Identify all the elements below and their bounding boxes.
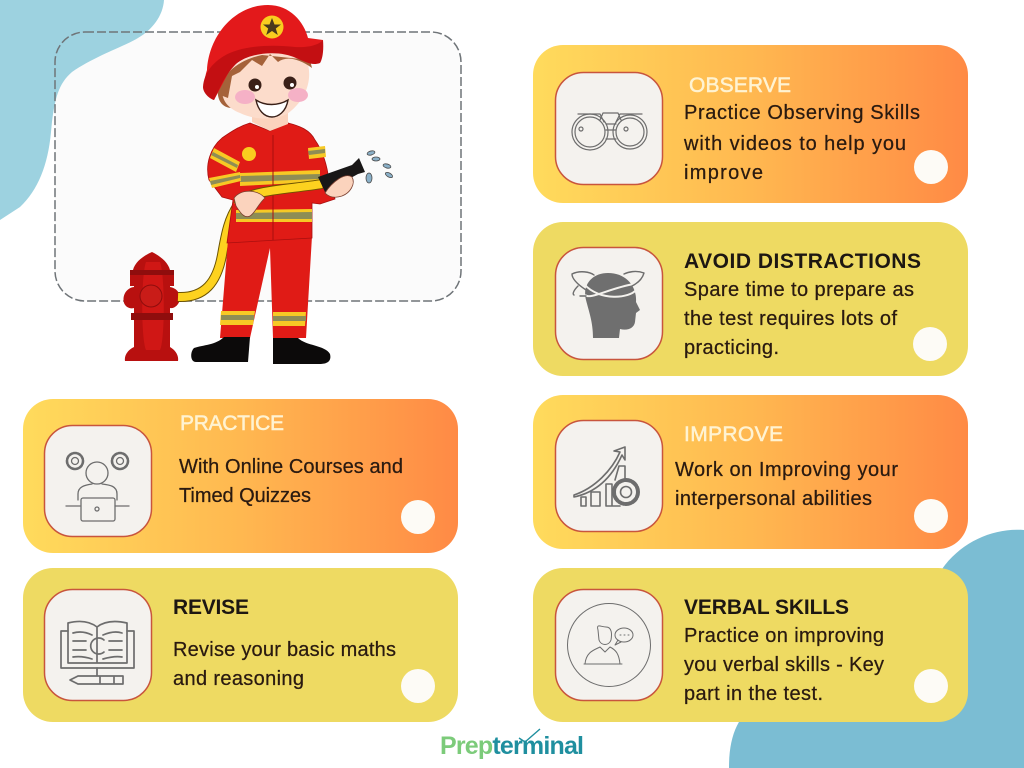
text: observe description: Practice Observing Skills: [684, 102, 920, 124]
blue blob bottom right: [729, 530, 1024, 768]
text: observe description: [683, 102, 920, 184]
water drops: [366, 150, 393, 183]
text: verbal skills description: [684, 625, 884, 705]
cheeks: [235, 88, 308, 104]
icon: open book with pencil: [61, 622, 134, 684]
text: avoid distractions description: Spare time to prepare as: [684, 279, 914, 301]
marker: [401, 500, 435, 534]
text: avoid distractions description: [684, 279, 914, 359]
panel: revise: [23, 568, 458, 722]
marker: [914, 669, 948, 703]
neck: [252, 112, 288, 131]
text: observe description: with videos to help you: [683, 133, 906, 155]
icon: growth chart with gear: [574, 447, 638, 506]
text: practice description: Timed Quizzes: [179, 485, 311, 507]
jacket button: [242, 147, 256, 161]
heading: practice: PRACTICE: [180, 412, 284, 435]
logo: Prepterminal: Prepterminal: [440, 732, 584, 760]
hose upper section: [238, 184, 322, 205]
marker: [914, 499, 948, 533]
icon: binoculars: [572, 113, 647, 150]
boots: [191, 337, 330, 364]
text: revise description: and reasoning: [173, 668, 304, 690]
text: avoid distractions description: the test requires lots of: [684, 308, 897, 330]
helmet: [203, 5, 323, 100]
text: revise description: [173, 639, 396, 690]
marker: [913, 327, 947, 361]
heading: observe: OBSERVE: [689, 74, 791, 97]
trousers: [220, 236, 312, 338]
text: practice description: With Online Courses and: [179, 456, 403, 478]
illustration: firefighter with hydrant: [123, 5, 393, 364]
panel: practice: [23, 399, 458, 553]
fire hydrant: [123, 252, 180, 361]
smile: [256, 100, 288, 117]
icon: speaker with speech bubble: [568, 604, 650, 686]
text: verbal skills description: part in the test.: [684, 683, 823, 705]
text: revise description: Revise your basic maths: [173, 639, 396, 661]
jacket reflective stripes: [209, 146, 326, 222]
text: verbal skills description: you verbal skills - Key: [684, 654, 884, 676]
text: improve description: interpersonal abilities: [675, 488, 872, 510]
jacket: [208, 123, 335, 243]
face: [222, 51, 309, 119]
hair back: [218, 60, 250, 108]
eyes: [248, 76, 296, 92]
heading: improve: IMPROVE: [684, 423, 783, 446]
text: verbal skills description: Practice on improving: [684, 625, 884, 647]
panel: observe: [533, 45, 968, 203]
text: avoid distractions description: practicing.: [684, 337, 779, 359]
text: observe description: improve: [684, 162, 763, 184]
marker: [914, 150, 948, 184]
icon: person with laptop and gears: [66, 453, 129, 521]
hand on hose: [234, 191, 265, 217]
heading: avoid distractions: AVOID DISTRACTIONS: [684, 250, 921, 273]
hose lower section: [178, 205, 238, 297]
panel: verbal skills: [533, 568, 968, 722]
text: improve description: [675, 459, 898, 510]
heading: verbal skills: VERBAL SKILLS: [684, 596, 849, 619]
panel: avoid distractions: [533, 222, 968, 376]
panel: improve: [533, 395, 968, 549]
blue blob top left: [0, 0, 164, 220]
hair: [220, 54, 312, 98]
text: practice description: [179, 456, 403, 507]
icon: head with orbit: [572, 271, 644, 338]
jacket zipper: [272, 135, 274, 240]
nozzle and hand: [318, 158, 365, 197]
heading: revise: REVISE: [173, 596, 249, 619]
marker: [401, 669, 435, 703]
text: improve description: Work on Improving your: [675, 459, 898, 481]
dashed frame: [55, 32, 461, 301]
illustration backdrop panel: [55, 32, 461, 301]
